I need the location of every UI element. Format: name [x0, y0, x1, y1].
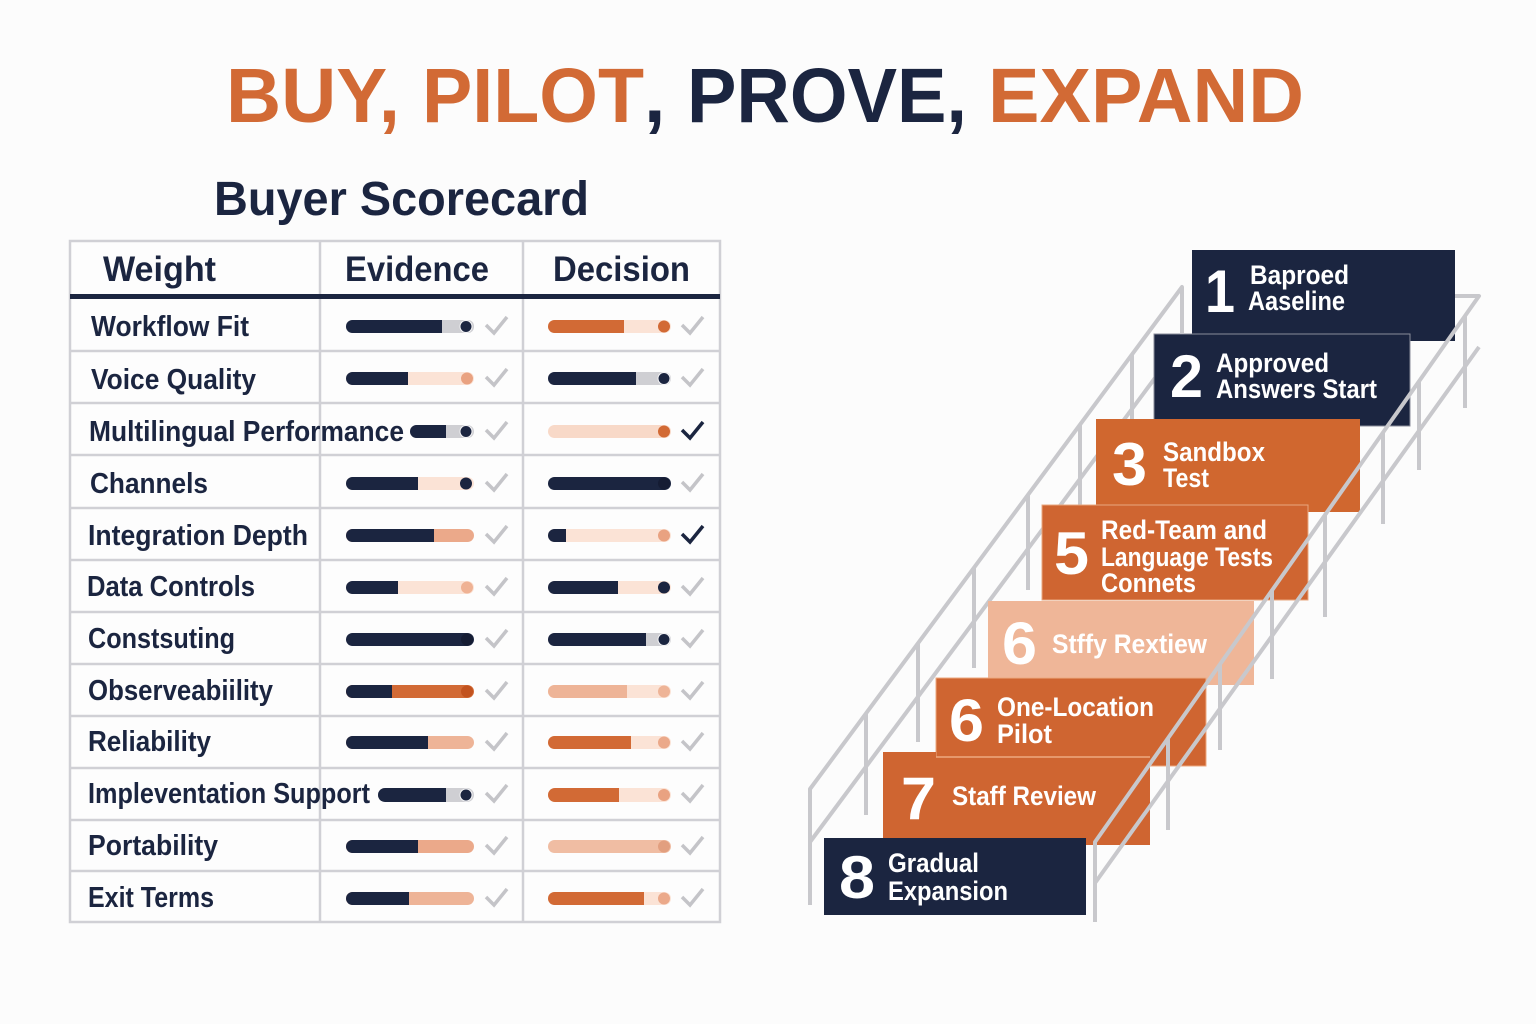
step 2: Answers Start: [1216, 374, 1377, 404]
diagram: staircase railing, left side: [810, 287, 1182, 905]
row: workflow fit: Workflow Fit: [91, 311, 249, 343]
step 5: Red-Team and: [1101, 515, 1267, 545]
title: PROVE,: [687, 53, 967, 139]
row: data controls: Data Controls: [87, 571, 255, 603]
row: reliability: [88, 726, 703, 758]
step 1: [1192, 250, 1455, 341]
step 7: Staff Review: [952, 781, 1097, 811]
row: channels: Channels: [90, 468, 208, 500]
row: observeabiility: [88, 675, 703, 707]
step 5: Connets: [1101, 568, 1196, 598]
step 6: stffy rextiew: Stffy Rextiew: [1052, 629, 1208, 659]
row: reliability: Reliability: [88, 726, 211, 758]
row: voice quality: [91, 364, 703, 396]
step 6: stffy rextiew: 6: [1002, 610, 1037, 677]
table header: Evidence: [345, 250, 489, 289]
row: workflow fit: [91, 311, 703, 343]
title: ,: [644, 53, 665, 139]
step 3: Test: [1163, 463, 1209, 493]
title: BUY,: [226, 53, 400, 139]
heading: buyer scorecard: Buyer Scorecard: [214, 173, 589, 226]
step 1: Baproed: [1250, 260, 1349, 290]
table header: Weight: [103, 250, 216, 289]
step 1: 1: [1205, 258, 1235, 325]
row: portability: Portability: [88, 830, 218, 862]
row: constsuting: Constsuting: [88, 623, 235, 655]
row: integration depth: [88, 520, 703, 552]
step 5: Language Tests: [1101, 542, 1273, 572]
step 2: [1154, 334, 1410, 426]
row: exit terms: Exit Terms: [88, 882, 214, 914]
row: constsuting: [88, 623, 703, 655]
table header: [103, 250, 690, 289]
step 7: 7: [901, 765, 936, 832]
step 1: Aaseline: [1248, 286, 1345, 316]
step 8: [824, 838, 1086, 915]
step 6: stffy rextiew: [988, 601, 1254, 685]
step 6: one-location pilot: 6: [949, 687, 984, 754]
row: integration depth: Integration Depth: [88, 520, 308, 552]
step 6: one-location pilot: [936, 678, 1206, 766]
row: observeabiility: Observeabiility: [88, 675, 273, 707]
title: PILOT: [422, 53, 644, 139]
step 8: Gradual: [888, 848, 979, 878]
step 6: one-location pilot: One-Location: [997, 692, 1154, 722]
step 3: 3: [1112, 431, 1147, 498]
row: impleventation support: Impleventation Support: [88, 778, 370, 810]
step 2: Approved: [1216, 348, 1329, 378]
title: EXPAND: [988, 53, 1304, 139]
row: multilingual performance: [89, 416, 703, 448]
diagram: staircase railing, right side: [1095, 296, 1479, 922]
step 8: Expansion: [888, 876, 1008, 906]
row: channels: [90, 468, 703, 500]
step 8: 8: [839, 844, 875, 911]
row: impleventation support: [88, 778, 703, 810]
row: portability: [88, 830, 703, 862]
step 5: [1042, 505, 1308, 600]
panel: scorecard table: [70, 241, 720, 922]
step 3: Sandbox: [1163, 437, 1265, 467]
row: exit terms: [88, 882, 703, 914]
row: data controls: [87, 571, 703, 603]
step 5: 5: [1054, 520, 1089, 587]
step 7: [883, 752, 1150, 845]
row: voice quality: Voice Quality: [91, 364, 256, 396]
step 6: one-location pilot: Pilot: [997, 719, 1052, 749]
step 2: 2: [1170, 343, 1203, 410]
row: multilingual performance: Multilingual Performance: [89, 416, 404, 448]
table header: Decision: [553, 250, 690, 289]
step 3: [1096, 419, 1360, 512]
title: [226, 53, 1304, 139]
